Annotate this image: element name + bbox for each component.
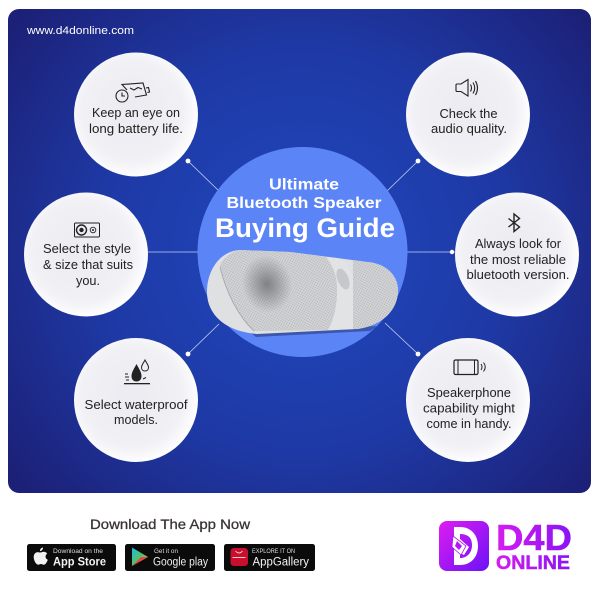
logo: D4D Online: ONLINE: [496, 552, 570, 574]
text: come in handy.: [426, 416, 512, 431]
download heading: Download The App Now: [90, 516, 251, 532]
text: capability might: [423, 400, 515, 416]
badge: App Store: App Store: [53, 556, 106, 568]
text: long battery life.: [89, 121, 183, 136]
title: Buying Guide: [215, 213, 395, 243]
text: [466, 236, 570, 282]
title: Bluetooth Speaker: [226, 195, 382, 212]
icon: speaker volume: [456, 80, 478, 96]
text: audio quality.: [431, 121, 507, 136]
text: the most reliable: [470, 252, 566, 267]
text: models.: [114, 412, 158, 427]
text: [84, 397, 188, 427]
text: Select waterproof: [84, 397, 188, 412]
icon: logo mark: [439, 521, 489, 571]
text: [423, 385, 515, 431]
badge: Google Play: Google play: [153, 556, 208, 568]
icon: phone with sound waves: [454, 360, 485, 374]
panel: speakerphone: [406, 338, 530, 462]
badge: AppGallery: EXPLORE IT ON: [252, 549, 295, 555]
text: [89, 105, 183, 136]
panel: style and size: [24, 192, 148, 316]
title: [215, 176, 395, 243]
website url: www.d4donline.com: [26, 25, 134, 37]
text: Select the style: [43, 241, 131, 256]
panel: bluetooth version: [455, 192, 579, 316]
icon: speaker box: [74, 223, 100, 237]
text: Keep an eye on: [92, 105, 180, 120]
title: Ultimate: [269, 176, 339, 194]
text: Speakerphone: [427, 385, 511, 400]
icon: play triangle: [132, 548, 148, 566]
text: [43, 241, 133, 288]
text: Always look for: [475, 236, 562, 251]
logo: D4D Online: [439, 517, 572, 574]
panel: waterproof: [74, 338, 198, 462]
text: bluetooth version.: [466, 267, 570, 282]
text: you.: [76, 273, 100, 288]
icon: bluetooth: [508, 214, 520, 232]
text: Check the: [440, 106, 498, 121]
badge: App Store: [27, 544, 116, 571]
badge: App Store: Download on the: [53, 549, 104, 555]
logo: D4D Online: D4D: [496, 517, 572, 558]
icon: apple: [34, 548, 48, 565]
connector lines: [148, 159, 455, 356]
badge: Google Play: [125, 544, 215, 571]
panel: central circle: [198, 147, 408, 357]
icon: battery with clock: [116, 83, 150, 102]
badge: AppGallery: AppGallery: [252, 556, 309, 568]
panel: battery life: [74, 52, 198, 176]
text: & size that suits: [43, 257, 133, 272]
text: [431, 106, 507, 136]
speaker photo: [207, 250, 398, 337]
panel: audio quality: [406, 52, 530, 176]
icon: huawei bag: [230, 548, 248, 566]
badge: Google Play: Get it on: [154, 549, 178, 555]
icon: water drops: [124, 360, 150, 384]
panel: blue background: [8, 9, 591, 493]
badge: AppGallery: [224, 544, 315, 571]
